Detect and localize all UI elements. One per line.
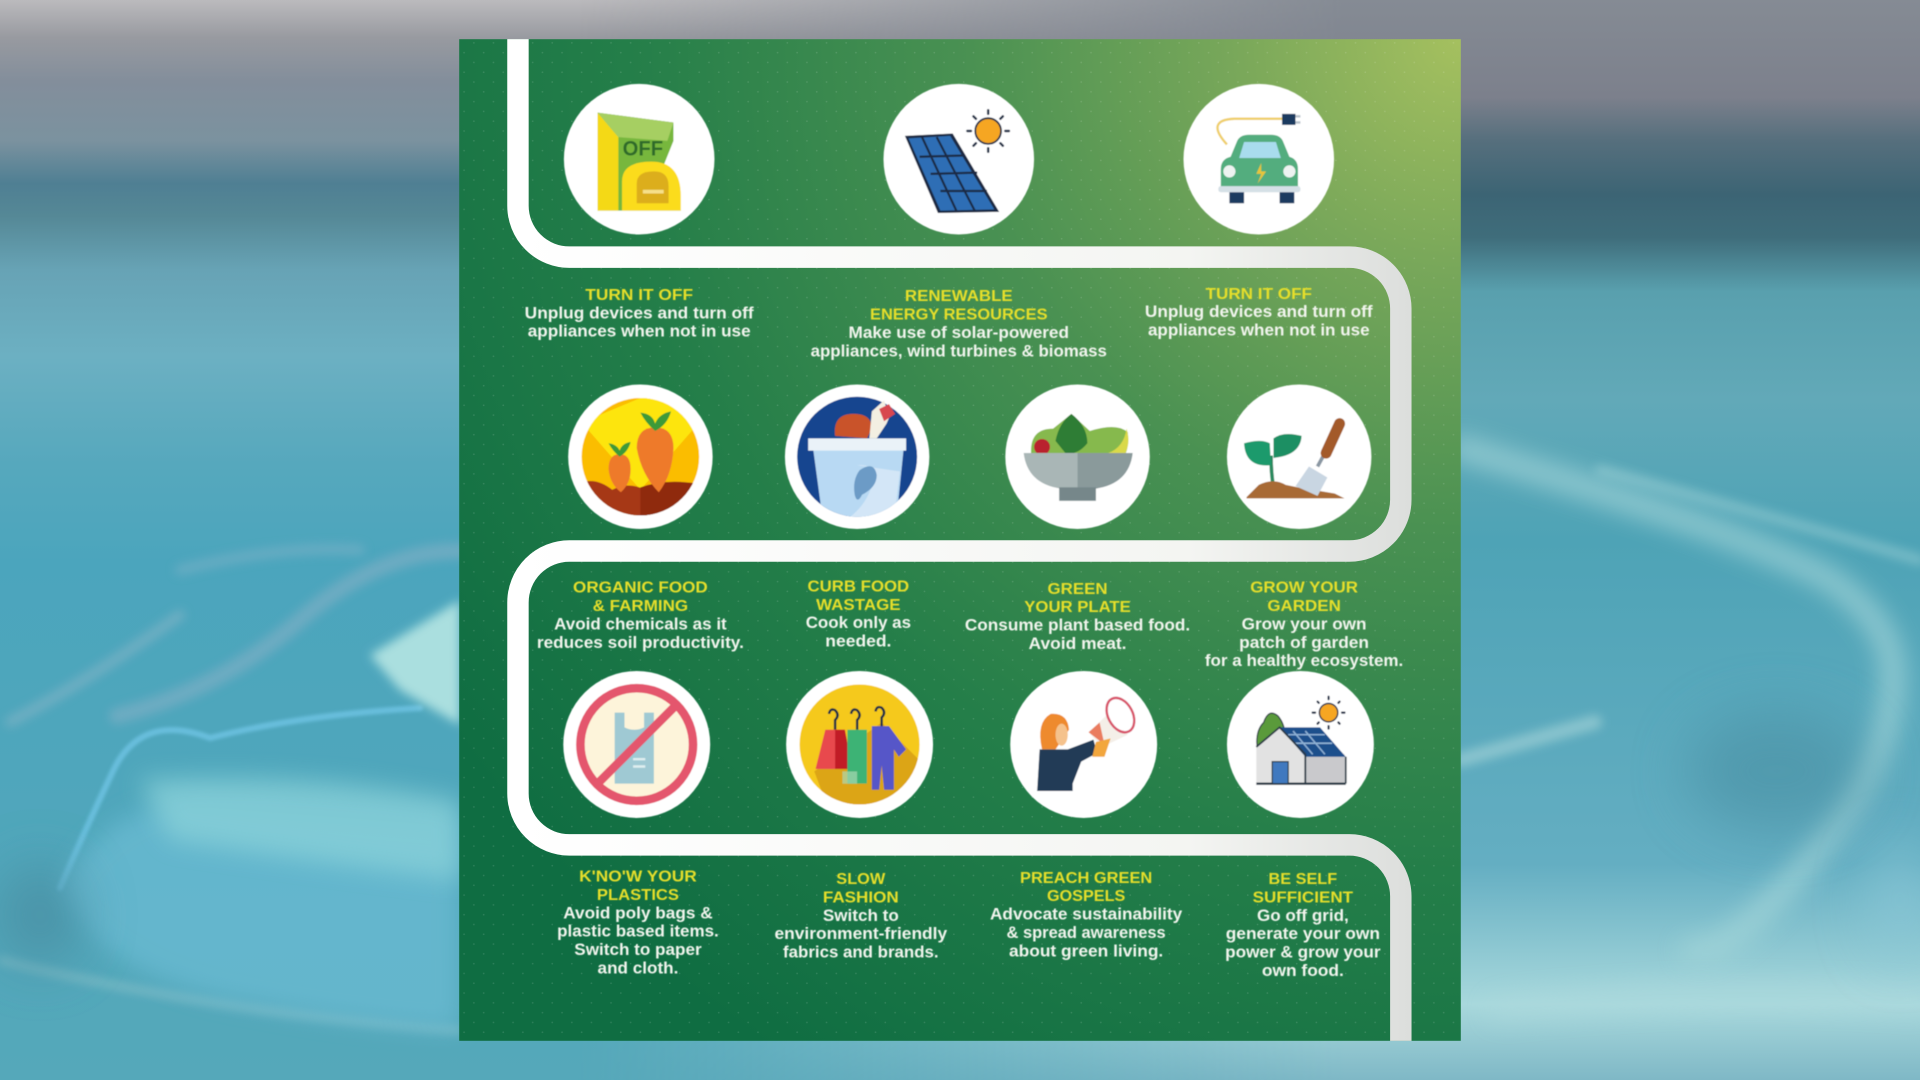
text: grow your garden: Grow your own bbox=[1242, 614, 1367, 633]
icon: slow fashion clothes bbox=[786, 671, 933, 820]
icon: solar house bbox=[1227, 671, 1374, 818]
text: preach green gospels: about green living. bbox=[1009, 941, 1163, 960]
text: know your plastics: K'NO'W YOUR bbox=[579, 869, 697, 886]
text: green your plate: YOUR PLATE bbox=[1024, 599, 1131, 616]
text: organic food and farming bbox=[537, 580, 744, 652]
text: turn it off (right): Unplug devices and turn off bbox=[1145, 302, 1373, 321]
icon: carrots organic farming bbox=[568, 384, 713, 529]
icon: solar panel and sun bbox=[883, 84, 1034, 234]
text: green your plate: Avoid meat. bbox=[1029, 634, 1127, 653]
text: organic food and farming: reduces soil productivity. bbox=[537, 633, 744, 652]
text: grow your garden: for a healthy ecosystem. bbox=[1205, 651, 1403, 670]
text: turn it off (right) bbox=[1145, 286, 1373, 340]
text: renewable energy resources: appliances, wind turbines & biomass bbox=[811, 341, 1107, 360]
panel: green tips poster bbox=[459, 39, 1461, 1041]
text: be self sufficient: Go off grid, bbox=[1257, 906, 1349, 925]
text: grow your garden: patch of garden bbox=[1239, 633, 1369, 652]
text: green your plate bbox=[965, 581, 1190, 653]
text: turn it off (right): TURN IT OFF bbox=[1206, 286, 1312, 303]
text: know your plastics: and cloth. bbox=[598, 958, 678, 977]
text: know your plastics: plastic based items. bbox=[557, 922, 719, 941]
text: slow fashion: SLOW bbox=[836, 871, 885, 888]
text: grow your garden: GROW YOUR bbox=[1250, 580, 1358, 597]
text: curb food wastage: CURB FOOD bbox=[808, 578, 909, 595]
text: organic food and farming: Avoid chemicals as it bbox=[554, 614, 727, 633]
icon: off switch: OFF bbox=[623, 138, 663, 161]
text: grow your garden bbox=[1205, 580, 1403, 670]
text: turn it off (left) bbox=[525, 287, 754, 341]
text: slow fashion: FASHION bbox=[823, 889, 899, 906]
text: know your plastics: Avoid poly bags & bbox=[563, 903, 713, 922]
icons row 1 bbox=[564, 84, 1334, 234]
text: be self sufficient bbox=[1225, 871, 1381, 980]
winding white road bbox=[518, 39, 1401, 1041]
text: slow fashion: environment-friendly bbox=[774, 924, 948, 943]
icon: sapling and trowel bbox=[1227, 384, 1371, 529]
text: organic food and farming: ORGANIC FOOD bbox=[573, 580, 708, 597]
text: renewable energy resources bbox=[811, 288, 1107, 360]
tip text blocks bbox=[525, 286, 1403, 980]
icons row 2 bbox=[568, 384, 1371, 529]
text: know your plastics bbox=[557, 869, 719, 977]
text: curb food wastage: Cook only as bbox=[806, 613, 911, 632]
text: know your plastics: PLASTICS bbox=[597, 887, 679, 904]
icon: food waste bucket bbox=[785, 384, 929, 529]
text: preach green gospels: PREACH GREEN bbox=[1020, 870, 1152, 887]
icon: off switch bbox=[564, 84, 714, 234]
icon: electric car bbox=[1183, 84, 1334, 234]
text: turn it off (left): TURN IT OFF bbox=[585, 287, 693, 304]
text: be self sufficient: BE SELF bbox=[1269, 871, 1337, 888]
text: renewable energy resources: Make use of solar-powered bbox=[849, 323, 1069, 342]
icons row 3 bbox=[563, 671, 1374, 820]
text: preach green gospels: & spread awareness bbox=[1007, 923, 1166, 942]
text: curb food wastage: WASTAGE bbox=[816, 597, 901, 614]
icon: no plastic bags bbox=[563, 671, 710, 818]
text: be self sufficient: generate your own bbox=[1226, 924, 1380, 943]
text: green your plate: Consume plant based food. bbox=[965, 616, 1190, 635]
text: turn it off (left): Unplug devices and turn off bbox=[525, 303, 754, 322]
text: organic food and farming: & FARMING bbox=[593, 598, 688, 615]
text: know your plastics: Switch to paper bbox=[574, 940, 702, 959]
text: renewable energy resources: ENERGY RESOURCES bbox=[870, 307, 1048, 324]
text: be self sufficient: own food. bbox=[1262, 961, 1344, 980]
text: curb food wastage: needed. bbox=[825, 632, 891, 651]
text: slow fashion: Switch to bbox=[823, 906, 899, 925]
text: turn it off (left): appliances when not in use bbox=[528, 322, 751, 341]
text: be self sufficient: SUFFICIENT bbox=[1253, 889, 1353, 906]
text: turn it off (right): appliances when not in use bbox=[1148, 321, 1370, 340]
text: renewable energy resources: RENEWABLE bbox=[905, 288, 1013, 305]
text: preach green gospels bbox=[990, 870, 1183, 960]
text: curb food wastage bbox=[806, 578, 911, 651]
text: green your plate: GREEN bbox=[1048, 581, 1108, 598]
text: slow fashion: fabrics and brands. bbox=[783, 943, 939, 962]
text: slow fashion bbox=[774, 871, 948, 962]
icon: woman with megaphone bbox=[1010, 671, 1157, 818]
text: grow your garden: GARDEN bbox=[1267, 598, 1341, 615]
text: preach green gospels: Advocate sustainability bbox=[990, 905, 1183, 924]
icon: salad bowl bbox=[1005, 384, 1150, 529]
text: be self sufficient: power & grow your bbox=[1225, 943, 1381, 962]
text: preach green gospels: GOSPELS bbox=[1047, 888, 1125, 905]
